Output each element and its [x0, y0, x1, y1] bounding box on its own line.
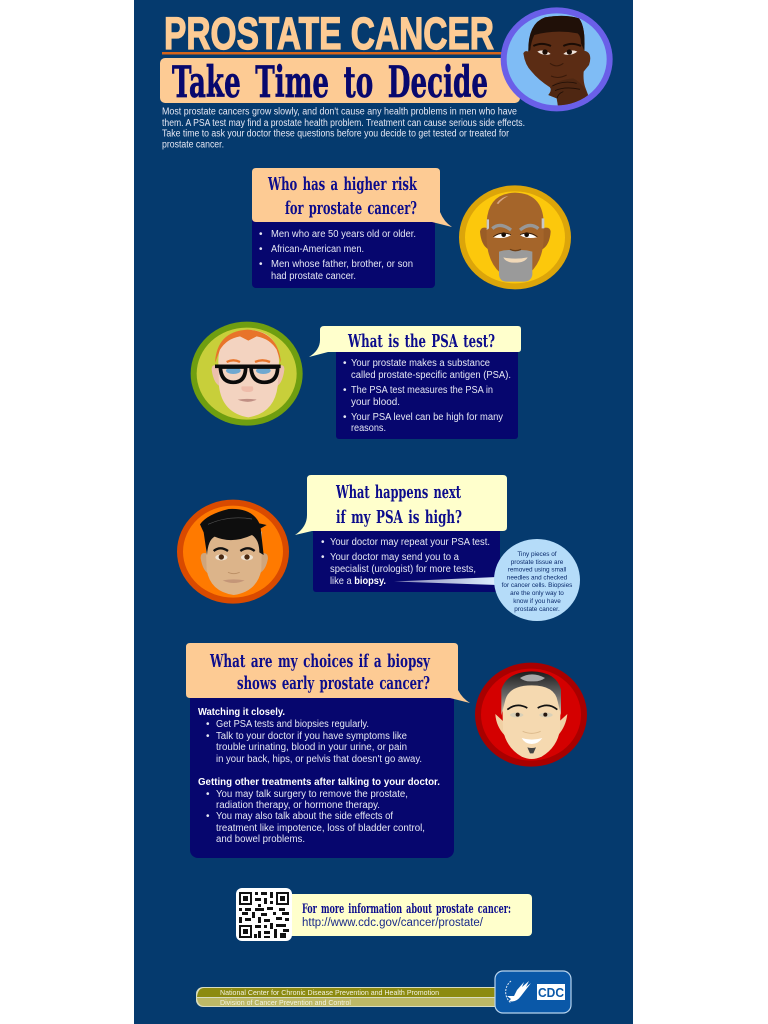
intro text: them. A PSA test may find a prostate health problem. Treatment can cause serious side effects.: [162, 118, 525, 129]
title rule: [162, 52, 504, 54]
biopsy callout: Tiny pieces of: [517, 551, 557, 558]
answer panel: [313, 527, 500, 592]
answer panel: in your back, hips, or pelvis that doesn't go away.: [216, 754, 422, 765]
biopsy callout: needles and checked: [507, 574, 568, 582]
biopsy callout: are the only way to: [510, 590, 564, 597]
speech bubble: What is the PSA test?: [347, 331, 495, 352]
question 4: biopsy choices: [186, 643, 470, 858]
more information box: http://www.cdc.gov/cancer/prostate/: [302, 917, 484, 929]
question 2: PSA test: [309, 326, 521, 439]
footer agency bar: [196, 987, 506, 1007]
answer panel: •: [321, 537, 325, 548]
answer panel: treatment like impotence, loss of bladder control,: [216, 823, 425, 834]
answer panel: Watching it closely.: [198, 707, 285, 718]
biopsy callout: for cancer cells. Biopsies: [502, 582, 572, 589]
speech bubble: [252, 168, 452, 227]
speech bubble: What are my choices if a biopsy: [209, 651, 430, 672]
answer panel: •: [206, 731, 210, 742]
answer panel: •: [321, 552, 325, 563]
portrait: grey-haired man: [475, 663, 587, 767]
answer panel: like a biopsy.: [330, 576, 386, 587]
background panel: [134, 0, 633, 1024]
speech bubble: if my PSA is high?: [336, 507, 462, 528]
answer panel: specialist (urologist) for more tests,: [330, 564, 476, 575]
speech bubble: shows early prostate cancer?: [237, 673, 430, 694]
biopsy callout: know if you have: [513, 598, 561, 605]
speech bubble: What happens next: [335, 482, 461, 503]
answer panel: your blood.: [351, 397, 400, 408]
more information box: For more information about prostate cancer:: [302, 902, 511, 917]
answer panel: reasons.: [351, 423, 386, 434]
answer panel: African-American men.: [271, 244, 364, 255]
biopsy callout: prostate cancer.: [514, 606, 560, 613]
intro text: Take time to ask your doctor these questions before you decide to get tested or treated for: [162, 128, 510, 140]
footer agency bar: National Center for Chronic Disease Prevention and Health Promotion: [220, 988, 439, 997]
CDC HHS logo: [495, 971, 571, 1013]
infographic: [134, 0, 633, 1024]
answer panel: radiation therapy, or hormone therapy.: [216, 800, 380, 811]
answer panel: •: [206, 719, 210, 730]
more information box: [286, 894, 532, 936]
answer panel: •: [206, 789, 210, 800]
answer panel: Getting other treatments after talking to your doctor.: [198, 777, 440, 788]
answer panel: had prostate cancer.: [271, 271, 356, 282]
speech bubble: Who has a higher risk: [267, 174, 417, 195]
biopsy pointer: [394, 577, 497, 585]
footer agency bar: Division of Cancer Prevention and Control: [220, 998, 351, 1007]
answer panel: Your doctor may send you to a: [330, 552, 459, 563]
answer panel: [190, 690, 454, 858]
title: prostate cancer: PROSTATE CANCER: [164, 8, 494, 59]
intro text: [162, 106, 525, 150]
portrait: dark-haired man: [177, 500, 289, 604]
question 3: high PSA: [295, 475, 580, 621]
subtitle banner: Take Time to Decide: [172, 58, 488, 108]
speech bubble: for prostate cancer?: [285, 198, 417, 219]
portrait: red-haired man with glasses: [191, 322, 303, 426]
answer panel: Men whose father, brother, or son: [271, 259, 413, 270]
answer panel: •: [343, 358, 347, 369]
intro text: prostate cancer.: [162, 140, 224, 150]
intro text: Most prostate cancers grow slowly, and don't cause any health problems in men who have: [162, 106, 517, 118]
answer panel: Men who are 50 years old or older.: [271, 229, 416, 240]
QR code: [236, 888, 292, 941]
answer panel: The PSA test measures the PSA in: [351, 385, 493, 396]
subtitle banner: [160, 58, 520, 108]
answer panel: •: [259, 229, 263, 240]
answer panel: Your PSA level can be high for many: [351, 412, 503, 423]
answer panel: called prostate-specific antigen (PSA).: [351, 370, 511, 381]
biopsy callout: removed using small: [508, 566, 566, 574]
CDC HHS logo: CDC: [538, 985, 565, 1000]
answer panel: Your prostate makes a substance: [351, 358, 490, 369]
biopsy callout: prostate tissue are: [511, 559, 564, 566]
portrait: thinking man: [501, 7, 613, 111]
answer panel: trouble urinating, blood in your urine, or pain: [216, 742, 407, 753]
portrait: bald older man with goatee: [459, 185, 571, 289]
answer panel: •: [259, 259, 263, 270]
answer panel: •: [343, 412, 347, 423]
answer panel: •: [259, 244, 263, 255]
answer panel: •: [206, 811, 210, 822]
answer panel: [336, 348, 518, 439]
speech bubble: [186, 643, 470, 703]
biopsy callout: [494, 539, 580, 621]
answer panel: and bowel problems.: [216, 834, 305, 845]
question 1: higher risk: [252, 168, 452, 288]
answer panel: Your doctor may repeat your PSA test.: [330, 537, 490, 548]
answer panel: You may also talk about the side effects of: [216, 811, 393, 822]
answer panel: You may talk surgery to remove the prostate,: [216, 789, 408, 800]
speech bubble: [309, 326, 521, 357]
speech bubble: [295, 475, 507, 535]
header: [160, 8, 525, 150]
answer panel: •: [343, 385, 347, 396]
answer panel: [252, 215, 435, 288]
answer panel: Get PSA tests and biopsies regularly.: [216, 719, 369, 730]
answer panel: Talk to your doctor if you have symptoms like: [216, 731, 407, 742]
